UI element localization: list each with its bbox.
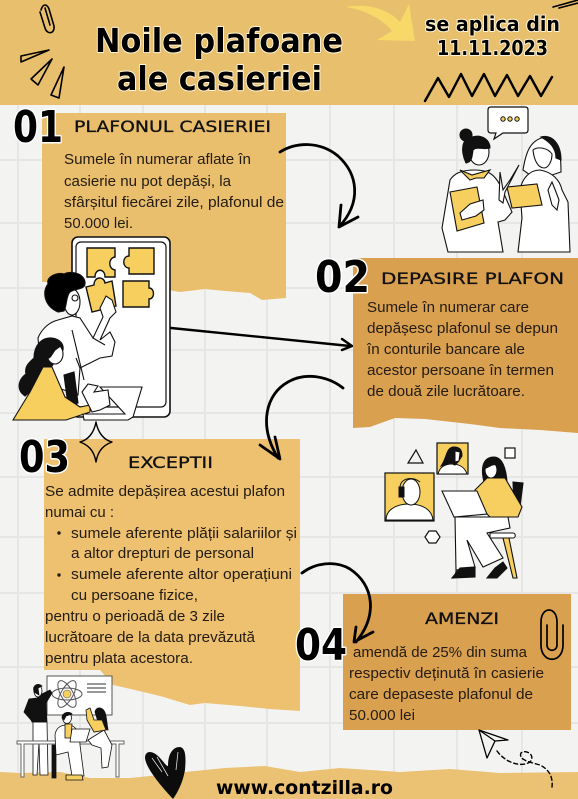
left woman	[442, 129, 519, 252]
icon: paperclip	[541, 610, 563, 659]
text block: panel 03 body: cu persoane fizice,	[71, 588, 198, 604]
illustration: women talking	[442, 107, 570, 252]
icon: paper plane	[479, 730, 508, 758]
panel: 02 depasire plafon	[353, 258, 578, 433]
icon: burst triangles	[21, 50, 64, 98]
man	[38, 272, 116, 395]
title: ale casieriei	[117, 59, 322, 98]
text block: panel 01 body	[64, 152, 284, 232]
large portrait	[385, 473, 434, 521]
text block: panel 02 body: Sumele în numerar care	[367, 300, 529, 316]
text block: panel 04 body: care depaseste plafonul de	[349, 687, 533, 703]
text block: panel 03 body: pentru plata acestora.	[45, 651, 193, 667]
illustration: woman with laptop and video portraits	[385, 443, 523, 578]
arrow: curve to panel 03	[260, 376, 343, 459]
illustration: team with atom board	[17, 676, 124, 780]
triangle	[408, 450, 423, 463]
icon: yellow arrow	[346, 4, 415, 41]
number 01: 01	[13, 102, 63, 153]
arrow: curve to panel 02	[280, 145, 358, 227]
text block: panel 02 body: în conturile bancare ale	[366, 342, 525, 358]
date note	[425, 12, 560, 60]
panel: 03 exceptii	[44, 439, 300, 711]
laptop	[82, 384, 142, 420]
text block: panel 04 body: respectiv deținută în casierie	[349, 666, 544, 682]
number 04: 04	[295, 620, 347, 671]
puzzle pieces	[86, 248, 154, 312]
heading: plafonul casieriei: PLAFONUL CASIERIEI	[74, 117, 271, 136]
panel: 04 amenzi	[343, 594, 571, 730]
text block: panel 02 body	[366, 300, 558, 400]
seated man	[52, 712, 90, 780]
text block: panel 04 body: 50.000 lei	[349, 708, 415, 724]
text block: panel 03 body: Se admite depășirea acestui plafon	[45, 484, 285, 500]
tablet	[72, 237, 170, 417]
text block: panel 03 body: numai cu :	[45, 505, 114, 521]
hexagon	[425, 531, 440, 543]
right woman	[507, 136, 570, 252]
panel: header band	[0, 0, 578, 105]
text block: panel 01 body: casierie nu pot depăși, la	[64, 174, 232, 190]
text block: panel 03 body	[45, 484, 297, 667]
date note: 11.11.2023	[437, 36, 548, 60]
text block: panel 03 body: sumele aferente altor operațiuni	[71, 567, 292, 583]
arrow: straight to panel 02	[171, 328, 352, 350]
text block: panel 03 body: lucrătoare de la data prevăzută	[45, 630, 256, 646]
text block: panel 01 body: 50.000 lei.	[64, 216, 133, 232]
speech bubble	[488, 107, 528, 139]
arrow: curve to panel 04	[302, 564, 373, 642]
heading: exceptii: EXCEPTII	[128, 453, 213, 472]
text block: panel 02 body: de două zile lucrătoare.	[367, 384, 525, 400]
small portrait	[437, 443, 468, 474]
table	[17, 741, 124, 777]
icon: sparkle	[80, 422, 112, 462]
board	[47, 676, 112, 715]
text block: panel 02 body: acestor persoane în termen	[367, 363, 554, 379]
text block: panel 03 body: pentru o perioadă de 3 zile	[45, 609, 225, 625]
woman	[13, 338, 90, 420]
icon: zigzag	[425, 74, 552, 101]
date note: se aplica din	[425, 12, 560, 36]
number 02: 02	[315, 252, 370, 303]
panel: 01 plafonul casieriei	[42, 113, 286, 300]
heading: amenzi: AMENZI	[425, 609, 499, 628]
text block: panel 01 body: Sumele în numerar aflate în	[64, 152, 251, 168]
text block: panel 03 body: sumele aferente plății salariilor și	[71, 526, 297, 542]
title: Noile plafoane	[95, 21, 343, 60]
text block: panel 01 body: sfârșitul fiecărei zile, plafonul de	[64, 195, 284, 211]
icon: paperclip top	[40, 5, 54, 33]
text block: panel 04 body: amendă de 25% din suma	[353, 645, 528, 661]
heading: depasire plafon: DEPASIRE PLAFON	[381, 269, 564, 288]
text block: panel 03 body: a altor drepturi de personal	[71, 546, 254, 562]
arrow: dashed flight path	[497, 751, 552, 787]
icon: heart	[145, 747, 185, 799]
panel: footer band	[0, 766, 578, 799]
text block: panel 04 body	[349, 645, 544, 724]
text block: panel 02 body: depășesc plafonul se depun	[367, 321, 558, 337]
square	[505, 448, 515, 458]
number 03: 03	[19, 432, 70, 483]
website url: www.contzilla.ro	[216, 777, 393, 799]
title	[95, 21, 343, 98]
illustration: tablet with puzzle and two people	[13, 237, 170, 420]
seated woman	[86, 708, 112, 768]
standing man	[24, 684, 52, 775]
icon: corner decoration	[553, 0, 578, 8]
woman	[442, 457, 523, 578]
